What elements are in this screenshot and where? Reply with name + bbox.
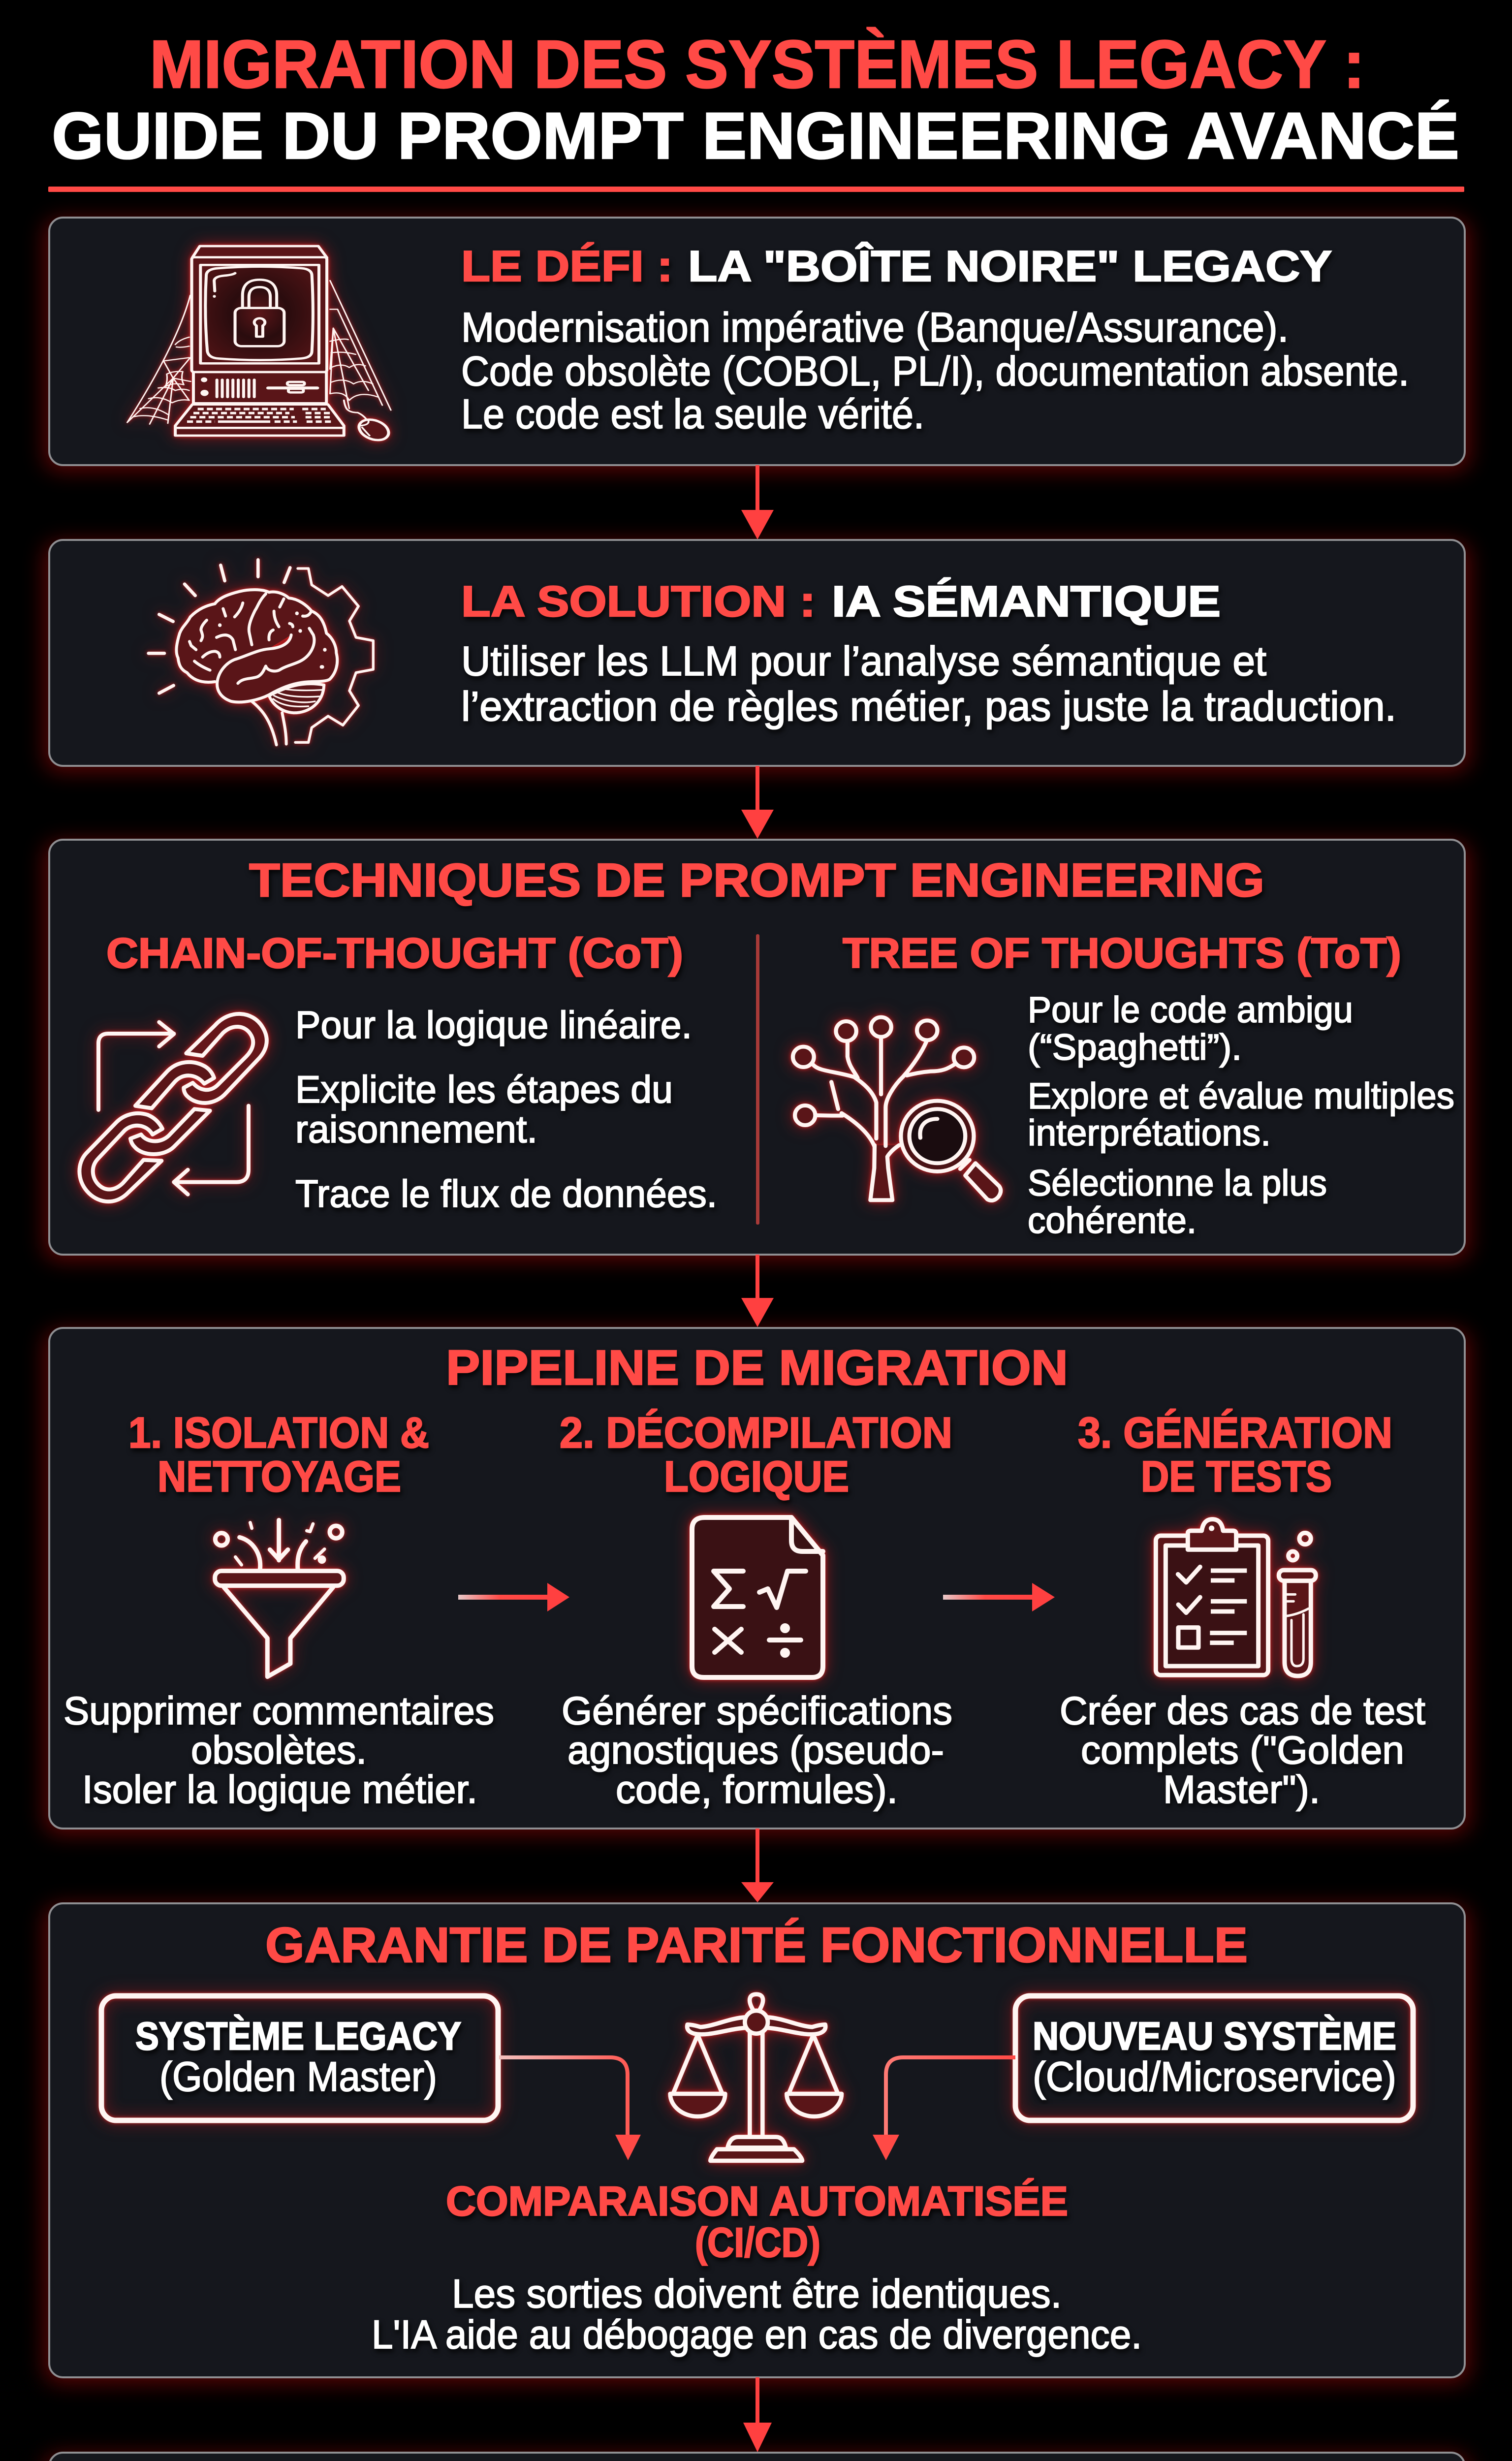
icon: old computer with padlock and cobwebs	[127, 246, 394, 444]
heading	[461, 242, 1332, 290]
panel: parité fonctionnelle	[49, 1903, 1465, 2377]
arrow: pipeline to parité	[741, 1829, 774, 1902]
text block	[461, 638, 1396, 729]
text block: step 2	[562, 1689, 952, 1811]
title	[52, 27, 1459, 173]
heading: IA SÉMANTIQUE	[832, 577, 1221, 626]
label: comparaison automatisée: COMPARAISON AUTOMATISÉE	[446, 2178, 1068, 2224]
box: système legacy: SYSTÈME LEGACY	[135, 2014, 461, 2058]
text block: l’extraction de règles métier, pas juste la traduction.	[461, 683, 1396, 729]
panel: le défi	[49, 218, 1465, 465]
text block: step 3: complets ("Golden	[1081, 1728, 1404, 1772]
text block: CoT: Pour la logique linéaire.	[295, 1003, 692, 1046]
box: nouveau système	[1015, 1996, 1413, 2120]
arrow: défi to solution	[741, 465, 774, 539]
panel: pipeline	[49, 1328, 1465, 1829]
icon: chain with arrows	[79, 1014, 267, 1201]
text block: Code obsolète (COBOL, PL/I), documentation absente.	[461, 348, 1409, 394]
text block: step 3: Master").	[1163, 1767, 1320, 1811]
text block: L'IA aide au débogage en cas de divergence.	[372, 2312, 1142, 2357]
arrow: solution to techniques	[741, 766, 774, 839]
icon: funnel	[215, 1520, 344, 1677]
text block: step 3: Créer des cas de test	[1060, 1689, 1425, 1733]
label: comparaison automatisée: (CI/CD)	[695, 2219, 820, 2266]
text block	[372, 2272, 1142, 2357]
text block: ToT: cohérente.	[1028, 1200, 1197, 1241]
icon: tree with magnifier	[793, 1017, 1001, 1200]
text block: step 3	[1060, 1689, 1425, 1811]
arrow: step 2 to 3	[943, 1583, 1055, 1611]
text block: ToT: interprétations.	[1028, 1112, 1271, 1153]
step 3 heading: DE TESTS	[1141, 1452, 1332, 1501]
icon: brain with gear	[149, 560, 373, 745]
arrow: step 1 to 2	[458, 1583, 569, 1611]
text block: ToT: Sélectionne la plus	[1028, 1163, 1327, 1203]
text block: Modernisation impérative (Banque/Assurance).	[461, 304, 1289, 350]
icon: document with math symbols	[692, 1517, 823, 1677]
arrow: techniques to pipeline	[741, 1255, 774, 1327]
text block: Le code est la seule vérité.	[461, 391, 924, 437]
icon: clipboard and test tube	[1156, 1519, 1316, 1676]
text block: step 1: obsolètes.	[191, 1728, 367, 1772]
text block: CoT	[295, 1003, 717, 1215]
text block: step 1: Isoler la logique métier.	[82, 1767, 477, 1811]
text block: CoT: Trace le flux de données.	[295, 1172, 717, 1215]
step 3 heading	[1078, 1408, 1392, 1501]
panel: techniques	[49, 840, 1465, 1255]
text block: Utiliser les LLM pour l’analyse sémantique et	[461, 638, 1266, 684]
icon: balance scales	[670, 1994, 842, 2161]
text block: ToT	[1028, 989, 1454, 1241]
step 2 heading: 2. DÉCOMPILATION	[560, 1408, 952, 1457]
heading: GARANTIE DE PARITÉ FONCTIONNELLE	[265, 1918, 1248, 1973]
box: nouveau système: NOUVEAU SYSTÈME	[1033, 2014, 1396, 2058]
subheading: tree of thoughts: TREE OF THOUGHTS (ToT)	[843, 930, 1401, 977]
panel: la solution	[49, 540, 1465, 766]
title: GUIDE DU PROMPT ENGINEERING AVANCÉ	[52, 99, 1459, 173]
subheading: chain of thought: CHAIN-OF-THOUGHT (CoT)	[106, 930, 683, 977]
arrow: nouveau to comparison	[873, 2057, 1015, 2160]
text block: step 2: Générer spécifications	[562, 1689, 952, 1733]
text block: CoT: Explicite les étapes du	[295, 1068, 673, 1111]
text block: ToT: (“Spaghetti”).	[1028, 1027, 1242, 1068]
text block	[461, 304, 1409, 437]
title: MIGRATION DES SYSTÈMES LEGACY :	[150, 27, 1365, 102]
step 2 heading: LOGIQUE	[664, 1452, 849, 1501]
arrow: legacy to comparison	[499, 2057, 641, 2160]
step 1 heading	[128, 1408, 429, 1501]
text block: Les sorties doivent être identiques.	[452, 2272, 1062, 2316]
step 3 heading: 3. GÉNÉRATION	[1078, 1408, 1392, 1457]
text block: CoT: raisonnement.	[295, 1107, 537, 1151]
box: nouveau système: (Cloud/Microservice)	[1033, 2053, 1396, 2100]
label: comparaison automatisée	[446, 2178, 1068, 2266]
heading: LA SOLUTION :	[461, 577, 816, 626]
box: système legacy	[101, 1996, 498, 2120]
text block: step 1	[63, 1689, 494, 1811]
text block: ToT: Explore et évalue multiples	[1028, 1075, 1454, 1116]
step 1 heading: NETTOYAGE	[158, 1452, 401, 1501]
panel: gestion des risques	[49, 2453, 1465, 2461]
box: système legacy: (Golden Master)	[159, 2053, 437, 2100]
text block: step 1: Supprimer commentaires	[63, 1689, 494, 1733]
heading	[461, 577, 1221, 626]
heading: TECHNIQUES DE PROMPT ENGINEERING	[249, 854, 1264, 907]
step 2 heading	[560, 1408, 952, 1501]
heading: LE DÉFI :	[461, 242, 673, 290]
arrow: parité to risques	[743, 2377, 772, 2452]
text block: step 2: code, formules).	[616, 1767, 898, 1811]
heading: PIPELINE DE MIGRATION	[446, 1340, 1068, 1395]
step 1 heading: 1. ISOLATION &	[128, 1408, 429, 1457]
heading: LA "BOÎTE NOIRE" LEGACY	[688, 242, 1332, 290]
text block: ToT: Pour le code ambigu	[1028, 989, 1353, 1030]
text block: step 2: agnostiques (pseudo-	[567, 1728, 944, 1772]
